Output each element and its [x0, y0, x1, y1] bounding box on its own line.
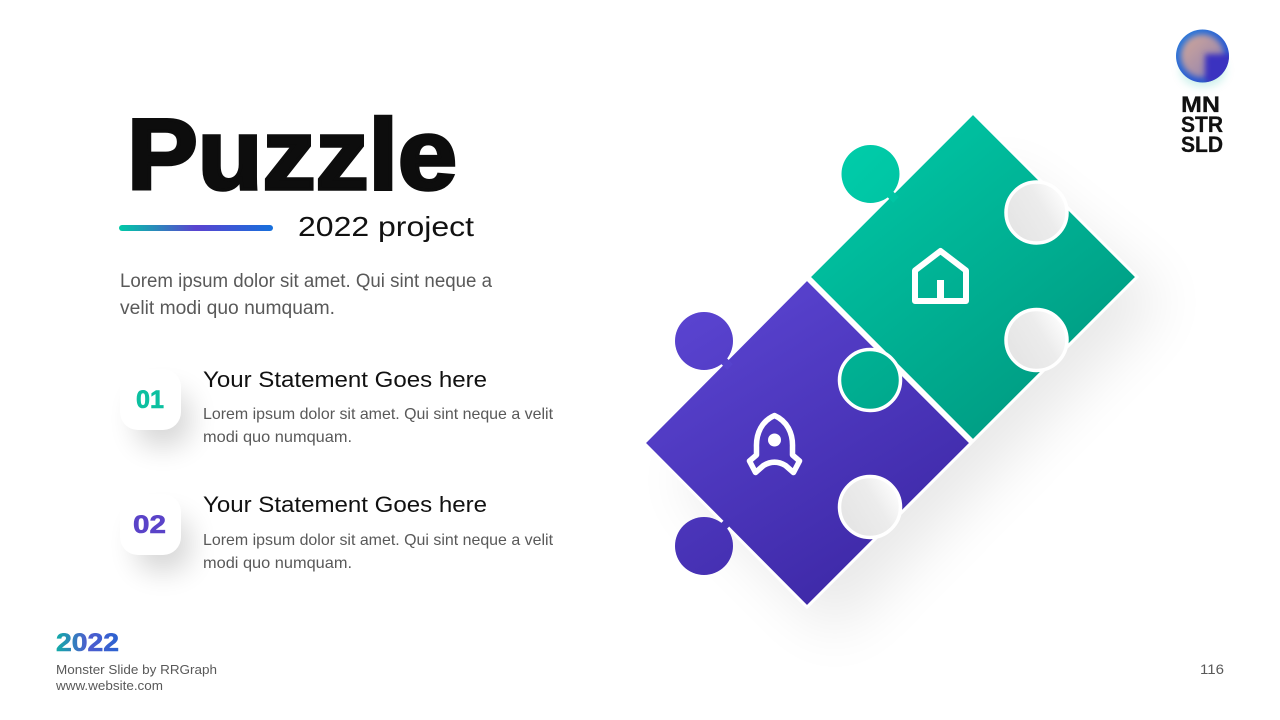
statement 01: [120, 367, 554, 446]
puzzle shadow: [680, 170, 1165, 635]
page number: 116: [1200, 661, 1224, 677]
logo text: [1181, 92, 1223, 157]
purple notch bottom: [840, 476, 900, 538]
logo orb: [1176, 30, 1235, 86]
subtitle: 2022 project: [298, 211, 474, 242]
statement 02: [120, 492, 554, 572]
green knob: [842, 145, 900, 203]
statement 02 heading: Your Statement Goes here: [203, 492, 487, 517]
puzzle graphic: [644, 113, 1165, 635]
badge 02: [120, 494, 190, 571]
badge 01: [120, 369, 190, 446]
green notch top: [1006, 182, 1067, 243]
purple knob bottom: [675, 517, 733, 575]
logo text: MN: [1181, 92, 1220, 117]
statement 02 body: Lorem ipsum dolor sit amet. Qui sint neque a velit: [203, 532, 554, 549]
icon: rocket: [750, 416, 800, 472]
footer credits: www.website.com: [55, 678, 163, 693]
green tab in purple notch: [840, 350, 900, 410]
intro text: [120, 271, 492, 319]
footer year: 2022: [56, 629, 119, 657]
footer credits: [55, 662, 217, 693]
logo text: SLD: [1181, 132, 1223, 157]
icon: house: [915, 251, 966, 301]
intro text: Lorem ipsum dolor sit amet. Qui sint neque a: [120, 271, 492, 292]
badge 01: 01: [136, 386, 164, 414]
badge 02: 02: [133, 511, 166, 539]
footer credits: Monster Slide by RRGraph: [56, 662, 217, 677]
statement 01 body: Lorem ipsum dolor sit amet. Qui sint neque a velit: [203, 406, 554, 423]
green puzzle piece: [809, 113, 1137, 441]
green notch bottom: [1006, 310, 1067, 370]
statement 02 body: modi quo numquam.: [203, 555, 352, 572]
purple puzzle piece: [644, 279, 971, 607]
statement 01 heading: Your Statement Goes here: [203, 367, 487, 392]
intro text: velit modi quo numquam.: [120, 298, 335, 319]
statement 01 body: modi quo numquam.: [203, 429, 352, 446]
logo text: STR: [1181, 112, 1223, 137]
purple knob top: [675, 312, 733, 370]
statement 01 body: [203, 406, 554, 446]
statement 02 body: [203, 532, 554, 572]
logo: [1176, 30, 1230, 152]
gradient underline: [119, 225, 273, 231]
title: Puzzle: [127, 99, 457, 211]
